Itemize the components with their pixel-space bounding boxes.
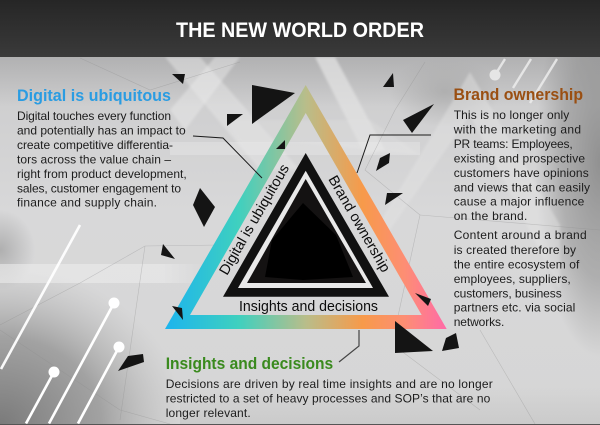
text block: insights: restricted to a set of heavy processes and SOP’s that are no: [166, 392, 491, 406]
panel: brand ownership: [453, 86, 590, 329]
connector: insights: [339, 330, 359, 362]
text block: digital: tors across the value chain –: [17, 152, 171, 166]
text block: brand paragraph 2: [454, 228, 587, 329]
text block: digital: finance and supply chain.: [17, 196, 157, 210]
text block: brand paragraph 2: is created therefore by: [454, 243, 576, 257]
text block: insights: Decisions are driven by real time insights and are no longer: [166, 377, 493, 391]
text block: brand paragraph 1: [453, 108, 590, 223]
text block: brand paragraph 2: employees, suppliers,: [454, 272, 571, 286]
connector: brand: [357, 135, 431, 173]
decorative circuit lines, top right: [490, 59, 557, 103]
title: THE NEW WORLD ORDER: [176, 19, 424, 42]
text block: brand paragraph 1: and views that can easily: [454, 180, 590, 194]
header bar: [0, 0, 600, 57]
text block: digital: right from product development,: [17, 167, 187, 181]
black shards: [118, 73, 459, 371]
triangle label: Insights and decisions: Insights and decisions: [239, 299, 378, 315]
text block: brand paragraph 1: customers have opinions: [454, 166, 589, 180]
text block: insights: longer relevant.: [166, 406, 251, 420]
text block: brand paragraph 1: PR teams: Employees,: [454, 137, 573, 151]
text block: digital: and potentially has an impact to: [17, 124, 186, 138]
connector: digital: [193, 136, 262, 178]
triangle label: Brand ownership: Brand ownership: [325, 173, 393, 275]
triangle: black inner pyramid: [223, 153, 389, 297]
panel: insights and decisions: [166, 355, 493, 420]
text block: brand paragraph 2: Content around a brand: [454, 228, 587, 242]
text block: digital: sales, customer engagement to: [17, 181, 181, 195]
heading: brand: Brand ownership: [454, 86, 583, 104]
text block: digital: [17, 109, 187, 210]
heading: digital: Digital is ubiquitous: [17, 87, 171, 105]
heading: insights: Insights and decisions: [166, 355, 333, 373]
text block: brand paragraph 1: existing and prospective: [454, 152, 585, 166]
text block: digital: Digital touches every function: [17, 109, 171, 123]
text block: brand paragraph 2: networks.: [454, 315, 504, 329]
text block: brand paragraph 1: cause a major influence: [454, 195, 585, 209]
panel: digital is ubiquitous: [17, 87, 187, 210]
text block: brand paragraph 1: with the marketing and: [453, 122, 581, 136]
text block: brand paragraph 1: on the brand.: [454, 209, 527, 223]
text block: brand paragraph 2: customers, business: [454, 286, 562, 300]
triangle label: Digital is ubiquitous: Digital is ubiquitous: [217, 162, 293, 278]
decorative circuit lines, bottom left: [1, 225, 124, 424]
bottom edge line: [0, 424, 600, 425]
text block: brand paragraph 1: This is no longer only: [454, 108, 569, 122]
text block: digital: create competitive differentia-: [17, 138, 173, 152]
text block: brand paragraph 2: the entire ecosystem of: [454, 257, 580, 271]
triangle: gradient outer rim: [165, 85, 447, 329]
text block: brand paragraph 2: partners etc. via social: [454, 301, 575, 315]
text block: insights: [166, 377, 493, 420]
